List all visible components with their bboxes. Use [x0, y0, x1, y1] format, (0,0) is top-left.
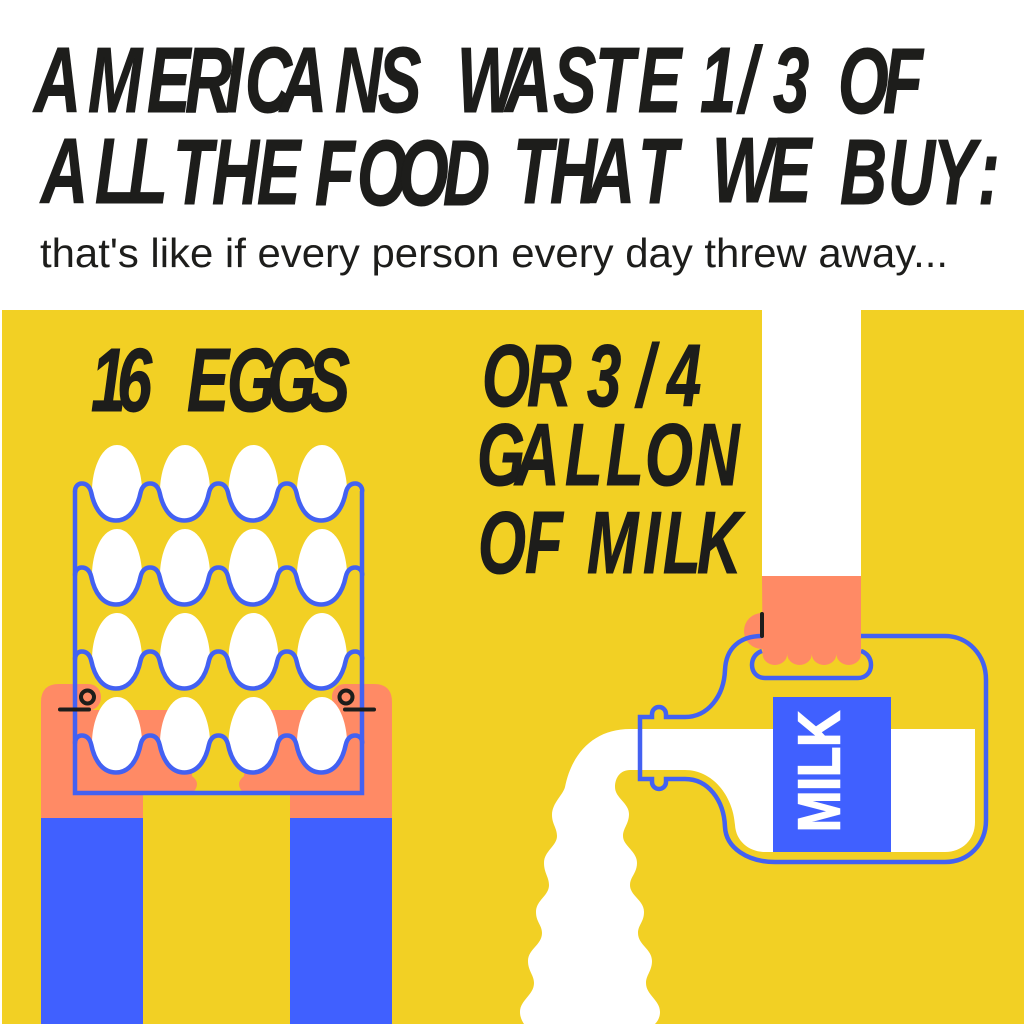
- right thumb: [340, 690, 374, 710]
- title: OF: [838, 30, 924, 134]
- right sleeve: [290, 818, 392, 1024]
- label text: MILK: [786, 711, 852, 832]
- carton frame: [75, 491, 362, 793]
- egg carton: [75, 445, 362, 793]
- title: WE: [712, 119, 813, 223]
- left thumb: [60, 690, 94, 710]
- milk stream and milk inside bottle: [520, 729, 975, 1024]
- egg row 4: [75, 697, 362, 772]
- heading: 16 eggs: [91, 331, 350, 431]
- title: THE: [173, 121, 302, 225]
- heading: 3/4 gallon of milk: [477, 327, 746, 593]
- title: [32, 29, 1000, 226]
- thumb line: [760, 614, 764, 636]
- milk label: [773, 697, 891, 852]
- yellow panel: [2, 310, 1024, 1024]
- title: BUY:: [840, 121, 1000, 225]
- title: THAT: [513, 120, 683, 224]
- subtitle: that's like if every person every day threw away...: [40, 230, 948, 276]
- right hand: [239, 684, 392, 818]
- heading: 3/4 gallon of milk: MILK: [587, 494, 746, 593]
- left hand: [41, 684, 197, 818]
- thumb behind bottle handle: [744, 613, 780, 649]
- egg row 2: [75, 529, 362, 604]
- title: AMERICANS: [32, 29, 421, 133]
- left sleeve: [41, 818, 143, 1024]
- title: WASTE: [457, 29, 683, 133]
- egg row 3: [75, 613, 362, 688]
- hand gripping bottle: [762, 576, 861, 665]
- heading: 3/4 gallon of milk: OF: [478, 494, 565, 593]
- title: ALL: [39, 120, 168, 224]
- bottle outline: [640, 636, 986, 862]
- heading: 16 eggs: EGGS: [187, 331, 350, 431]
- arm column above the milk hand: [762, 310, 861, 576]
- heading: 3/4 gallon of milk: GALLON: [477, 406, 741, 505]
- title: FOOD: [315, 122, 490, 226]
- heading: 3/4 gallon of milk: OR: [482, 327, 572, 426]
- heading: 16 eggs: 16: [91, 331, 153, 431]
- heading: 3/4 gallon of milk: 3/4: [587, 327, 701, 426]
- arms holding egg carton: [41, 684, 392, 1024]
- title: 1/3: [700, 29, 809, 133]
- egg row 1: [75, 445, 362, 520]
